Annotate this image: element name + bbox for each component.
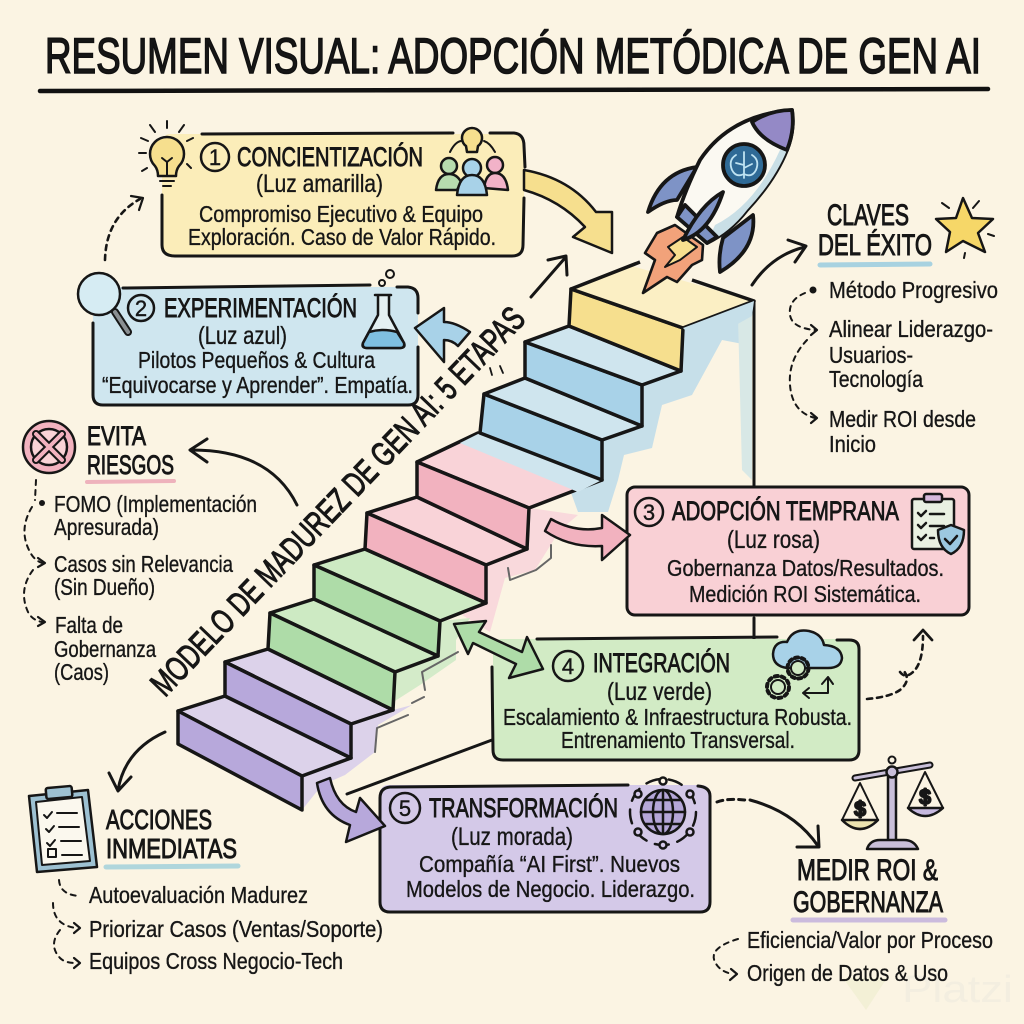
flame [643,225,703,293]
stage colour label: (Luz amarilla) [256,170,383,198]
diagonal heading: MODELO DE MADUREZ DE GEN AI: 5 ETAPAS [143,300,533,704]
list: Gobernanza [54,636,156,662]
stage 5 steps: purple [178,649,393,810]
heading: GOBERNANZA [793,886,943,919]
stage heading: EXPERIMENTACIÓN [164,292,357,323]
stage colour label: (Luz verde) [607,678,712,706]
arrow: to evita riesgos [190,439,297,505]
arrow: dashed to concientizacion [105,196,143,260]
stage 1 steps: yellow [569,262,754,371]
arrow: blue to experimentacion [415,308,470,362]
list [24,480,257,685]
arrow: to medir roi [717,799,819,847]
nose [752,110,793,150]
list [714,927,993,986]
stage colour label: (Luz morada) [451,823,573,851]
heading: MEDIR ROI & [797,854,938,887]
stage heading: TRANSFORMACIÓN [429,792,618,823]
stage description: Exploración. Caso de Valor Rápido. [188,224,496,250]
panel: concientizacion [162,128,525,256]
stage heading: CONCIENTIZACIÓN [237,141,423,172]
list: Usuarios- [829,342,913,368]
list: (Sin Dueño) [54,574,155,600]
stage colour label: (Luz azul) [198,322,287,350]
number badge 1 [201,143,229,171]
structural lines behind stairs [347,301,754,794]
list: Autoevaluación Madurez [89,882,308,908]
number badge 1: 1 [209,145,221,170]
watermark [843,969,1013,1011]
icon: checklist with shield [912,494,964,554]
stage description: “Equivocarse y Aprender”. Empatía. [102,372,413,398]
icon: flask [362,270,404,348]
stair underside colour wash [302,301,754,810]
stage 2 steps: blue [460,326,681,492]
base and centre fin [677,192,723,243]
list: Origen de Datos & Uso [747,960,948,986]
icon: light bulb [139,121,193,186]
list: Casos sin Relevancia [54,551,233,577]
arrow: yellow to stair top [524,170,612,253]
icon: balance scale: $ [854,799,866,821]
stage description: Entrenamiento Transversal. [561,727,795,753]
stage 3 steps: pink [365,433,602,603]
panel: acciones inmediatas [29,786,383,974]
list: Medir ROI desde [829,406,976,432]
arrow: green double-headed [454,621,543,678]
arrow: pink to adopcion temprana [545,515,630,560]
heading: ACCIONES [106,804,212,835]
heading: INMEDIATAS [106,833,237,864]
stage description: Compañía “AI First”. Nuevos [419,851,680,877]
heading [818,199,932,265]
list [790,277,998,457]
stage description [406,851,695,902]
icon: no sign [23,421,75,473]
heading: DEL ÉXITO [818,229,932,262]
stage description: Compromiso Ejecutivo & Equipo [199,201,483,227]
panel: medir roi y gobernanza [714,854,993,986]
arrow: to claves [752,240,806,285]
stage description [102,347,413,398]
icon: balance scale: $ [919,787,931,809]
stage colour label: (Luz rosa) [727,526,820,554]
body [677,110,793,243]
list: Equipos Cross Negocio-Tech [89,948,343,974]
list: Apresurada) [54,514,159,540]
panel: transformacion [380,778,710,912]
stage heading: INTEGRACIÓN [593,647,730,678]
number badge 2 [128,295,154,321]
list [53,880,383,974]
stage description [667,555,944,607]
list: FOMO (Implementación [54,491,257,517]
icon: globe network [630,778,696,848]
stage description: Gobernanza Datos/Resultados. [667,555,944,581]
heading: RIESGOS [87,450,174,480]
heading [793,854,945,920]
stage heading: ADOPCIÓN TEMPRANA [672,495,899,526]
stage description: Pilotos Pequeños & Cultura [138,347,375,373]
arrow: dashed from integracion [867,630,932,699]
arrow: to acciones [109,732,165,791]
list: Método Progresivo [829,277,998,303]
number badge 5 [390,793,420,823]
number badge 3: 3 [643,500,655,525]
list: Tecnología [829,366,923,392]
panel: evita riesgos [23,421,257,685]
number badge 4: 4 [562,654,574,679]
list: Falta de [55,612,123,638]
icon: clipboard checklist [29,786,97,872]
number badge 5: 5 [399,796,411,821]
heading: EVITA [87,421,146,451]
icon: star [936,198,994,258]
panel: experimentacion [93,270,418,405]
stage description: Medición ROI Sistemática. [689,581,921,607]
arrow: to rocket [531,256,567,297]
stage description [503,704,852,753]
window with brain [723,144,765,186]
heading [87,421,174,482]
icon: magnifying glass [78,273,128,332]
icon: balance scale [842,756,943,849]
staircase: five stages [178,262,754,810]
number badge 2: 2 [135,296,147,321]
stage description: Modelos de Negocio. Liderazgo. [406,876,695,902]
icon: rocket [643,110,793,293]
stage 4 steps: green [268,549,486,710]
number badge 3 [635,498,663,526]
stage description: Escalamiento & Infraestructura Robusta. [503,704,852,730]
arrow: purple to transformacion [317,778,385,842]
number badge 4 [553,651,583,681]
panel: integracion [492,630,859,760]
fins [648,167,753,272]
stage description [188,201,496,250]
panel: claves del exito [790,198,998,457]
list: Inicio [829,431,876,457]
icon: cloud and gears [767,630,842,698]
list: (Caos) [54,659,109,685]
panel: adopcion temprana [627,487,969,615]
arrows: black connectors [105,196,932,847]
list: Alinear Liderazgo- [829,316,993,342]
icon: team with idea [436,128,508,195]
heading: CLAVES [827,199,909,232]
heading [106,804,238,867]
watermark: Platzi [902,969,1013,1011]
list: Priorizar Casos (Ventas/Soporte) [89,916,383,942]
